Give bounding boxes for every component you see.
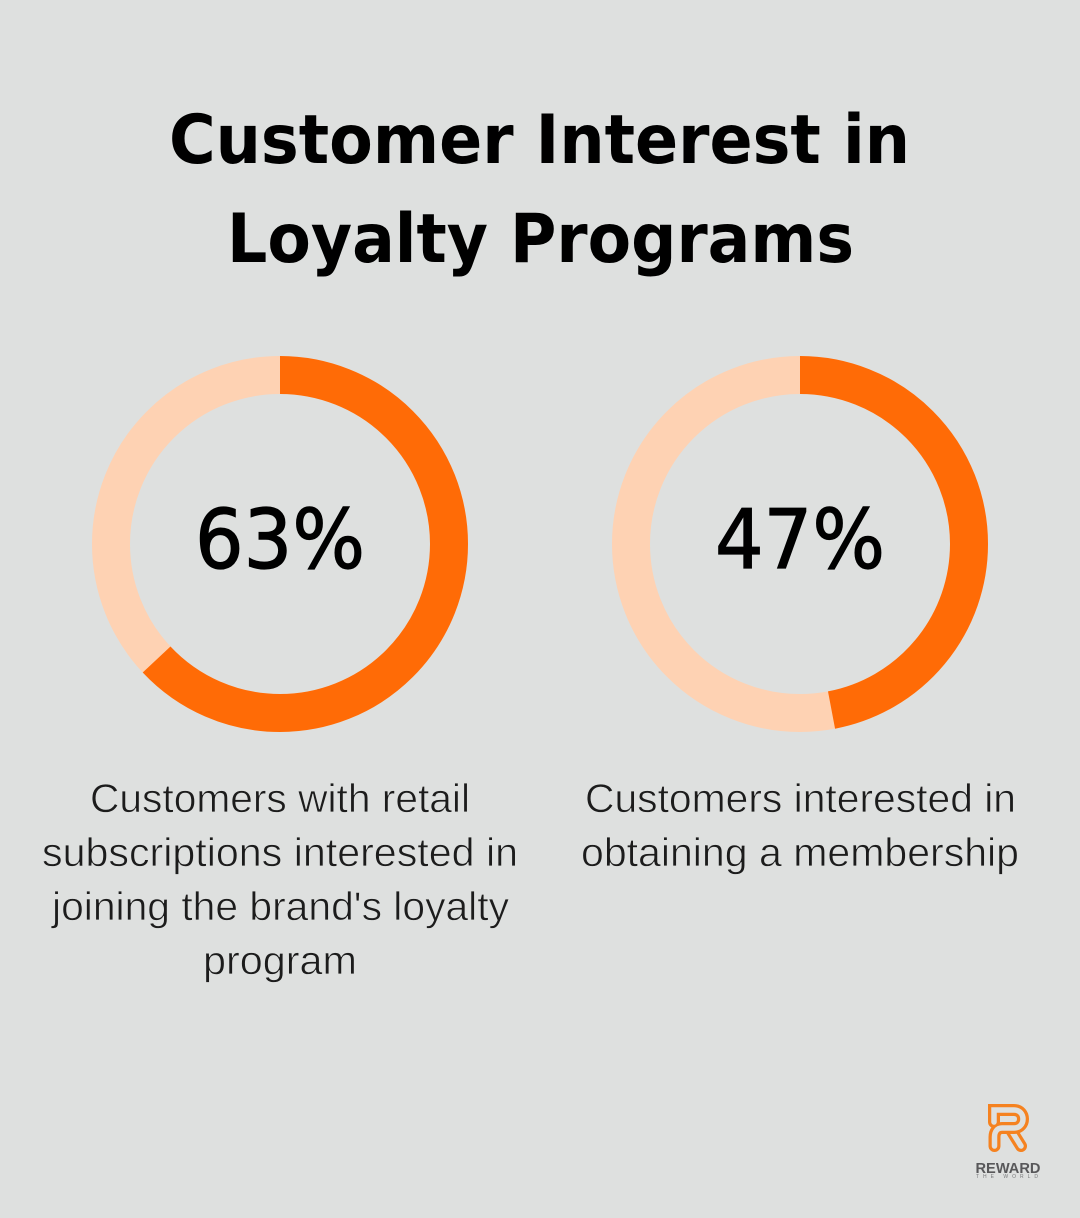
caption: retail subscriptions: joining the brand's loyalty bbox=[51, 885, 509, 929]
caption: retail subscriptions: subscriptions interested in bbox=[42, 831, 518, 875]
caption: membership: Customers interested in bbox=[585, 777, 1016, 821]
donut chart: 63% bbox=[111, 375, 449, 713]
title: Loyalty Programs bbox=[227, 200, 854, 279]
value: 47%: 47% bbox=[715, 493, 885, 588]
caption: membership bbox=[581, 777, 1019, 875]
caption: retail subscriptions bbox=[42, 777, 518, 983]
tagline: THE WORLD bbox=[976, 1174, 1038, 1180]
panel: 47% stat bbox=[581, 375, 1019, 875]
donut chart: 47% bbox=[631, 375, 969, 713]
wordmark: REWARD bbox=[976, 1161, 1040, 1177]
caption: retail subscriptions: Customers with retail bbox=[90, 777, 470, 821]
panel: 63% stat bbox=[42, 375, 518, 983]
title: Customer Interest in bbox=[169, 101, 910, 180]
value: 63%: 63% bbox=[195, 493, 365, 588]
caption: membership: obtaining a membership bbox=[581, 831, 1019, 875]
caption: retail subscriptions: program bbox=[203, 939, 357, 983]
icon: R mark bbox=[994, 1110, 1023, 1146]
logo: Reward the World bbox=[976, 1110, 1040, 1180]
title bbox=[169, 101, 910, 279]
